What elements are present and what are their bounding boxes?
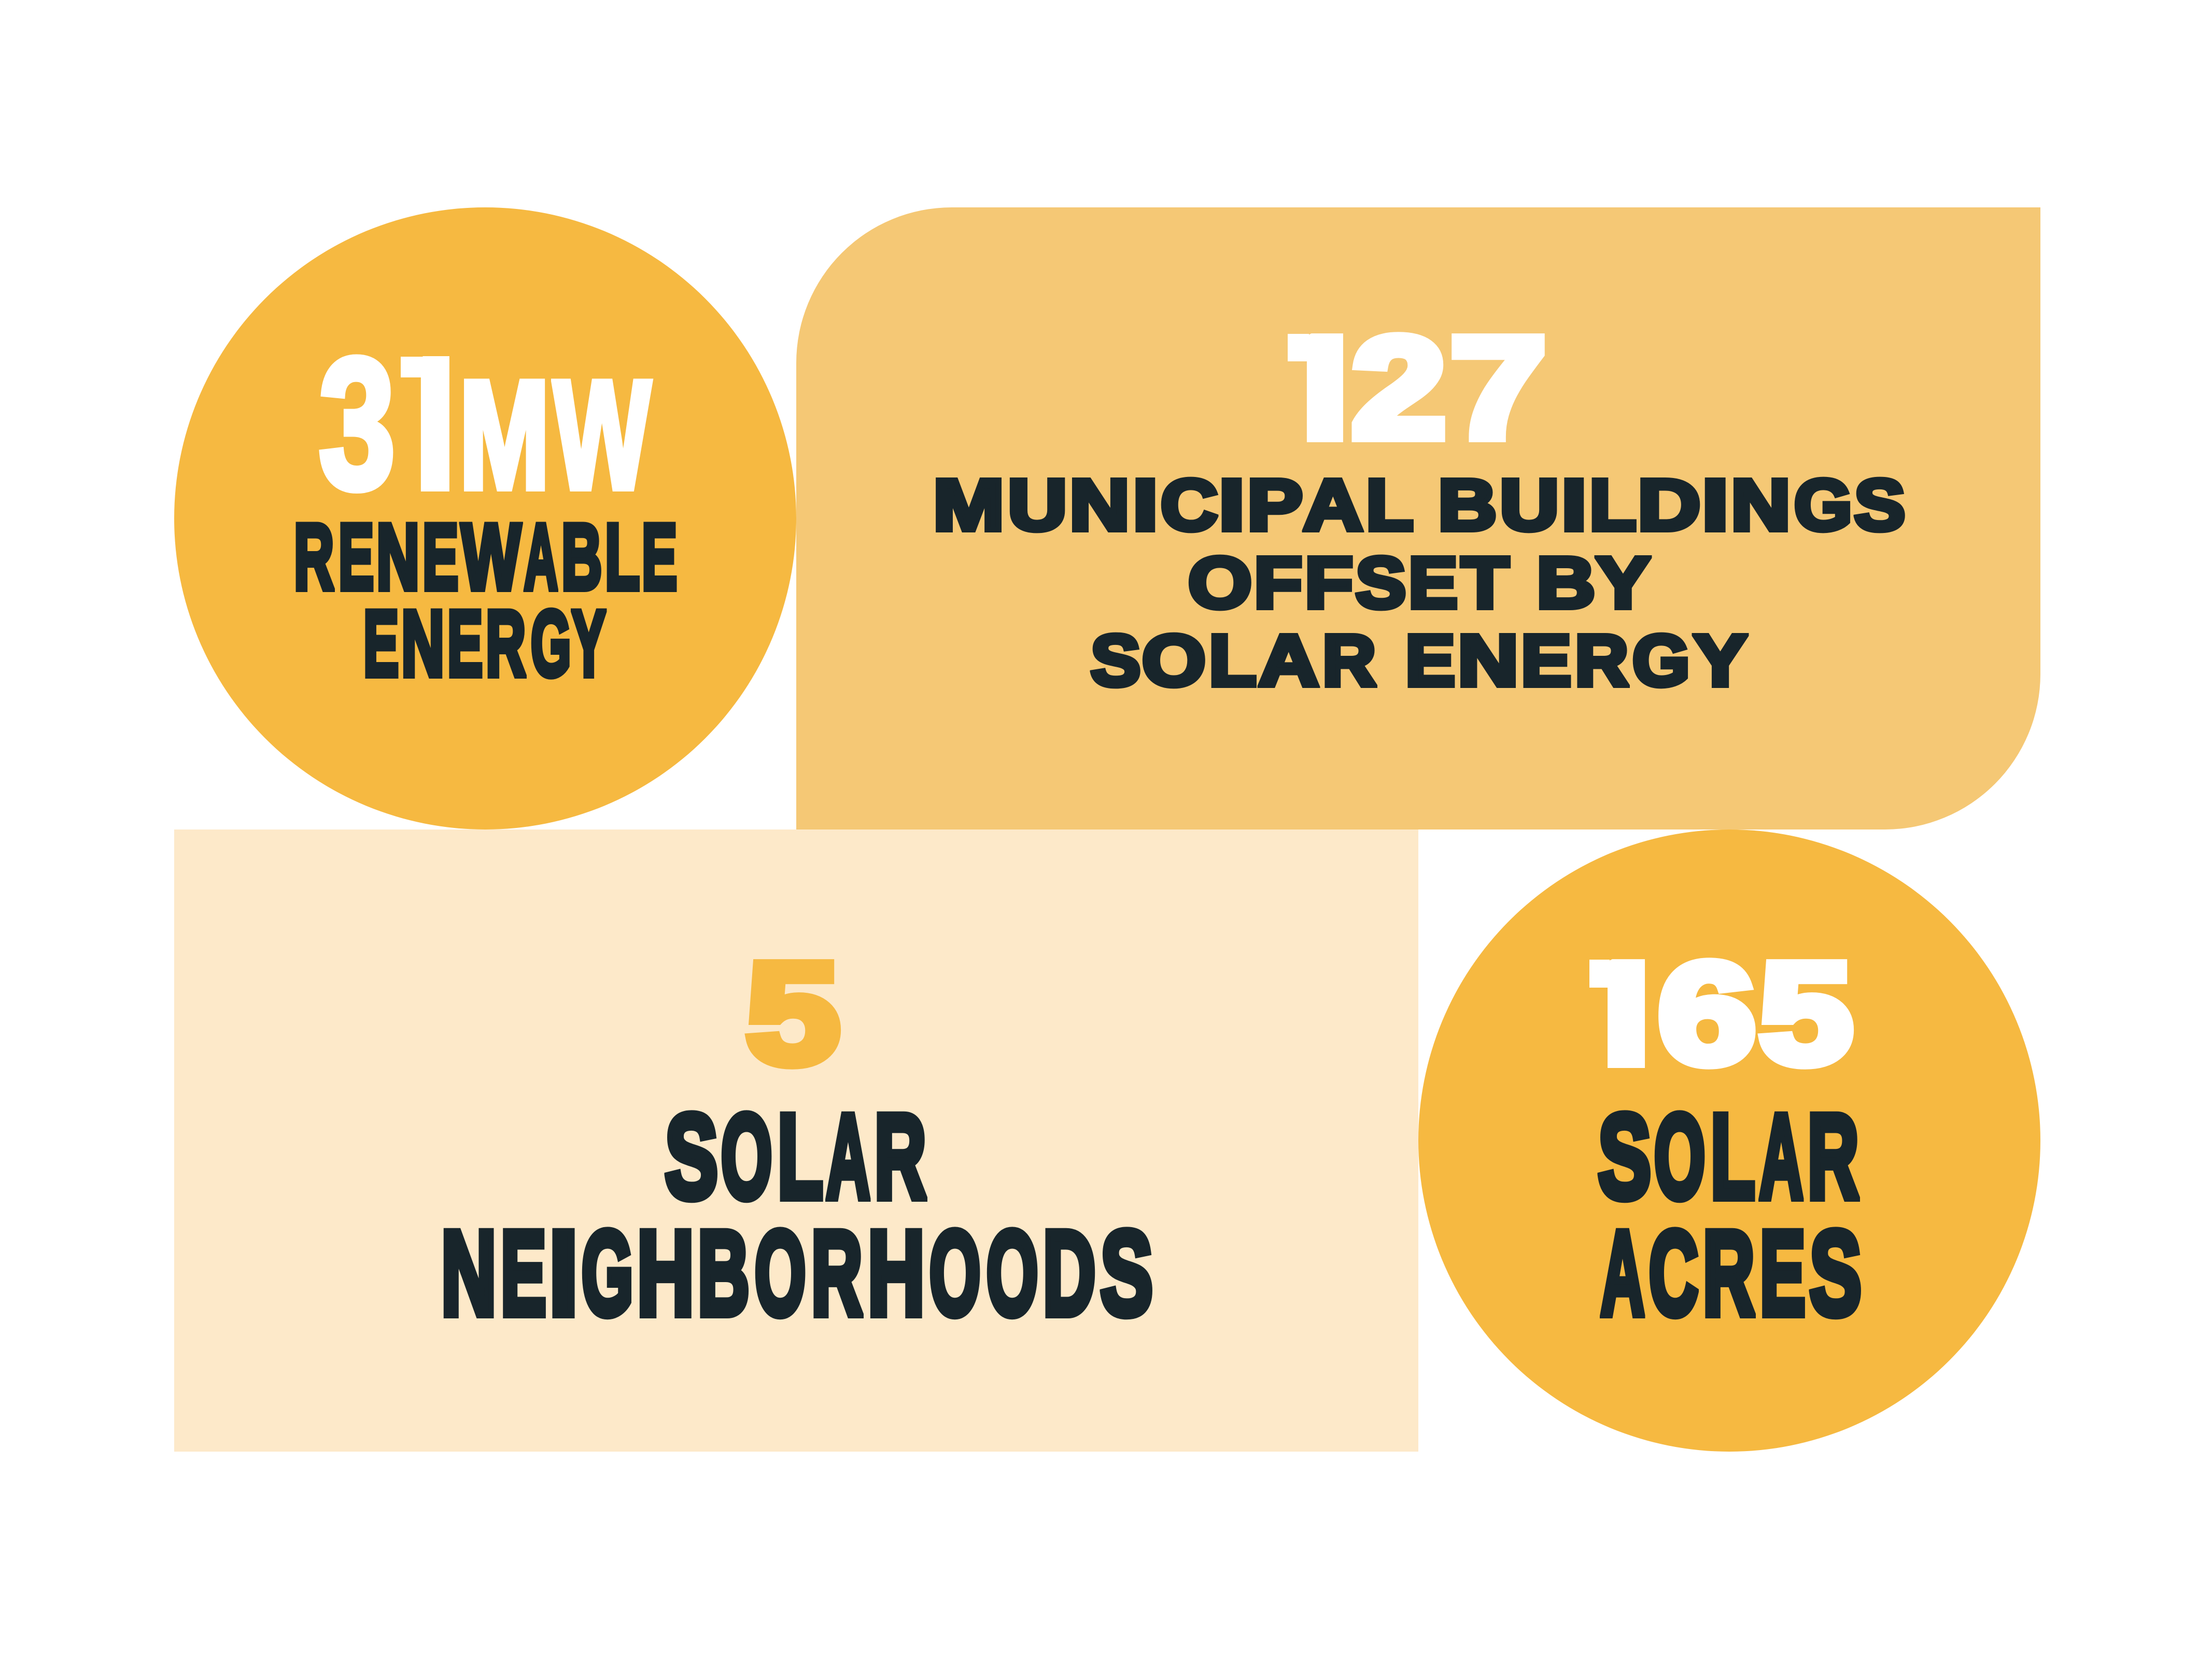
value: 31MW bbox=[319, 320, 653, 528]
label: solar acres bbox=[1598, 1090, 1861, 1340]
label: municipal buildings offset by solar energy: S bbox=[1854, 465, 1905, 545]
label: municipal buildings offset by solar energy: S bbox=[1091, 620, 1140, 701]
value: 165: 5 bbox=[1759, 934, 1853, 1093]
label: solar acres: C bbox=[1649, 1206, 1698, 1340]
label: renewable energy: E bbox=[363, 592, 399, 696]
value: 165: 6 bbox=[1658, 934, 1756, 1093]
value: 165: 1 bbox=[1568, 934, 1675, 1093]
panel: 165 solar acres bbox=[1418, 830, 2040, 1452]
label: municipal buildings offset by solar energy: L bbox=[1209, 620, 1257, 701]
value: 31MW: 3 bbox=[319, 320, 396, 528]
label: municipal buildings offset by solar energy: L bbox=[1366, 465, 1414, 545]
label: solar neighborhoods: S bbox=[1101, 1206, 1152, 1340]
label: municipal buildings offset by solar energy: T bbox=[1461, 542, 1509, 623]
label: solar neighborhoods: S bbox=[665, 1090, 717, 1223]
label: solar acres: R bbox=[1703, 1206, 1754, 1340]
label: solar neighborhoods: R bbox=[811, 1206, 862, 1340]
label: municipal buildings offset by solar energy: R bbox=[1322, 620, 1376, 701]
value: 127: 7 bbox=[1450, 308, 1546, 468]
label: renewable energy: Y bbox=[572, 592, 606, 696]
label: renewable energy: E bbox=[339, 505, 374, 609]
label: municipal buildings offset by solar energy: Y bbox=[1694, 620, 1746, 701]
label: municipal buildings offset by solar energy: C bbox=[1161, 465, 1218, 545]
label: renewable energy: G bbox=[531, 592, 571, 696]
label: solar neighborhoods: H bbox=[868, 1206, 925, 1340]
label: solar neighborhoods: O bbox=[721, 1090, 772, 1223]
label: municipal buildings offset by solar energy: S bbox=[1356, 542, 1406, 623]
label: municipal buildings offset by solar energy: E bbox=[1408, 542, 1457, 623]
label: solar neighborhoods: E bbox=[501, 1206, 546, 1340]
label: municipal buildings offset by solar energy: O bbox=[1188, 542, 1252, 623]
label: solar neighborhoods: N bbox=[441, 1206, 497, 1340]
label: municipal buildings offset by solar energy: N bbox=[1731, 465, 1791, 545]
label: solar acres: S bbox=[1598, 1090, 1651, 1223]
label: municipal buildings offset by solar energy: D bbox=[1638, 465, 1700, 545]
label: renewable energy: R bbox=[294, 505, 334, 609]
panel: 5 solar neighborhoods bbox=[174, 830, 1418, 1452]
label: municipal buildings offset by solar energy: U bbox=[1500, 465, 1559, 545]
label: solar neighborhoods: R bbox=[875, 1090, 926, 1223]
label: solar neighborhoods: A bbox=[826, 1090, 870, 1223]
label: solar acres: E bbox=[1760, 1206, 1805, 1340]
panel: 31MW renewable energy bbox=[174, 207, 796, 830]
value: 31MW: M bbox=[459, 349, 550, 521]
label: municipal buildings offset by solar energy: I bbox=[1133, 465, 1158, 545]
label: renewable energy: W bbox=[461, 505, 520, 609]
label: municipal buildings offset by solar energy: A bbox=[1303, 465, 1362, 545]
label: solar neighborhoods: L bbox=[778, 1090, 823, 1223]
label: municipal buildings offset by solar energy: Y bbox=[1596, 542, 1650, 623]
label: renewable energy: E bbox=[422, 505, 458, 609]
label: solar acres: L bbox=[1711, 1090, 1755, 1223]
label: municipal buildings offset by solar energy: L bbox=[1589, 465, 1637, 545]
label: municipal buildings offset by solar energy: P bbox=[1247, 465, 1303, 545]
label: solar neighborhoods: O bbox=[755, 1206, 806, 1340]
label: renewable energy: N bbox=[376, 505, 420, 609]
label: municipal buildings offset by solar energy: N bbox=[1458, 620, 1518, 701]
label: municipal buildings offset by solar energy bbox=[933, 465, 1905, 701]
value: 127: 1 bbox=[1269, 308, 1372, 468]
value: 31MW: 1 bbox=[382, 320, 480, 528]
label: solar neighborhoods: O bbox=[987, 1206, 1038, 1340]
label: renewable energy: E bbox=[447, 592, 483, 696]
label: municipal buildings offset by solar energy: I bbox=[1702, 465, 1729, 545]
label: municipal buildings offset by solar energy: G bbox=[1794, 465, 1852, 545]
label: municipal buildings offset by solar energy: B bbox=[1537, 542, 1595, 623]
label: solar acres: A bbox=[1759, 1090, 1803, 1223]
label: solar neighborhoods: D bbox=[1043, 1206, 1095, 1340]
value: 31MW: W bbox=[554, 349, 651, 521]
label: municipal buildings offset by solar energy: G bbox=[1632, 620, 1689, 701]
value: 127 bbox=[1288, 308, 1546, 468]
label: renewable energy: A bbox=[524, 505, 558, 609]
panel: 127 municipal buildings bbox=[796, 207, 2040, 830]
label: renewable energy: N bbox=[401, 592, 445, 696]
label: solar neighborhoods: H bbox=[637, 1206, 694, 1340]
label: solar neighborhoods: B bbox=[698, 1206, 749, 1340]
label: municipal buildings offset by solar energy: B bbox=[1438, 465, 1497, 545]
label: renewable energy: B bbox=[561, 505, 602, 609]
label: municipal buildings offset by solar energy: A bbox=[1259, 620, 1318, 701]
label: solar neighborhoods bbox=[441, 1090, 1152, 1340]
label: municipal buildings offset by solar energy: R bbox=[1575, 620, 1628, 701]
value: 5: 5 bbox=[746, 934, 840, 1093]
label: solar acres: O bbox=[1654, 1090, 1706, 1223]
label: solar neighborhoods: O bbox=[929, 1206, 981, 1340]
value: 127: 2 bbox=[1352, 308, 1445, 468]
label: municipal buildings offset by solar energy: I bbox=[1219, 465, 1245, 545]
label: solar acres: S bbox=[1810, 1206, 1861, 1340]
label: solar neighborhoods: I bbox=[549, 1206, 578, 1340]
label: solar acres: R bbox=[1808, 1090, 1858, 1223]
label: municipal buildings offset by solar energy: N bbox=[1069, 465, 1130, 545]
label: municipal buildings offset by solar energy: I bbox=[1561, 465, 1586, 545]
label: municipal buildings offset by solar energy: M bbox=[933, 465, 1005, 545]
label: renewable energy: R bbox=[486, 592, 526, 696]
value: 165 bbox=[1589, 934, 1854, 1093]
label: municipal buildings offset by solar energy: O bbox=[1142, 620, 1206, 701]
label: municipal buildings offset by solar energy: E bbox=[1405, 620, 1455, 701]
label: municipal buildings offset by solar energy: U bbox=[1008, 465, 1067, 545]
label: renewable energy: L bbox=[605, 505, 639, 609]
label: renewable energy bbox=[294, 505, 677, 696]
label: solar acres: A bbox=[1601, 1206, 1644, 1340]
label: municipal buildings offset by solar energy: F bbox=[1254, 542, 1302, 623]
label: municipal buildings offset by solar energy: F bbox=[1305, 542, 1353, 623]
label: solar neighborhoods: G bbox=[582, 1206, 633, 1340]
label: renewable energy: E bbox=[642, 505, 677, 609]
label: municipal buildings offset by solar energy: E bbox=[1521, 620, 1571, 701]
